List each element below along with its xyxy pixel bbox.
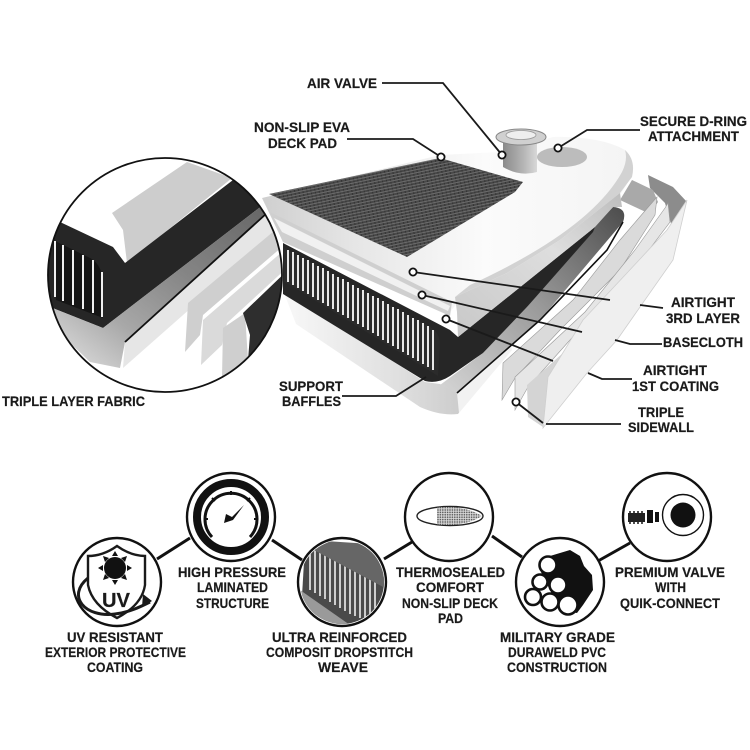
label: non-slip EVA deck pad: NON-SLIP EVA — [254, 119, 350, 135]
leader: air valve — [382, 83, 506, 159]
icon: thermosealed deck pad — [405, 473, 493, 561]
text: military grade: DURAWELD PVC — [508, 644, 606, 660]
inner wall gray — [440, 207, 624, 393]
leader: 1st coating — [442, 315, 632, 379]
wall edge line — [457, 222, 623, 393]
icon: premium valve — [623, 473, 711, 561]
label: support baffles: SUPPORT — [279, 378, 343, 394]
label: basecloth: BASECLOTH — [663, 334, 743, 350]
board top surface — [262, 137, 632, 312]
UV letters: UV — [102, 590, 131, 612]
illustration: exploded board — [262, 129, 687, 428]
swoosh arrow — [78, 578, 150, 614]
nose rim shading — [455, 150, 633, 297]
label: airtight 1st coating: AIRTIGHT — [643, 362, 707, 378]
leader: deck pad — [347, 139, 445, 161]
rail highlight — [274, 218, 450, 311]
label: airtight 1st coating — [632, 362, 719, 394]
text: military grade: MILITARY GRADE — [500, 629, 615, 645]
label: triple layer fabric: TRIPLE LAYER FABRIC — [2, 393, 145, 409]
text: UV resistant: UV RESISTANT — [67, 629, 163, 645]
text: UV resistant: EXTERIOR PROTECTIVE — [45, 644, 186, 660]
leader: support baffles — [342, 377, 426, 396]
leader: D-ring — [554, 130, 640, 152]
connectors between icons — [157, 536, 630, 561]
lens: triple layer fabric close-up — [47, 157, 283, 393]
plate: bottom skin — [283, 290, 510, 414]
text: premium valve — [615, 564, 725, 611]
label: triple sidewall — [628, 404, 694, 435]
rail shading — [270, 212, 452, 316]
text: thermosealed comfort: NON-SLIP DECK — [402, 595, 498, 611]
leader: 3rd layer — [409, 268, 663, 308]
icon: dropstitch weave — [295, 535, 390, 630]
text: thermosealed comfort: THERMOSEALED — [396, 564, 505, 580]
text: premium valve: QUIK-CONNECT — [620, 595, 720, 611]
label: non-slip EVA deck pad — [254, 119, 350, 151]
text: UV resistant: COATING — [87, 659, 143, 675]
lens gray tab — [112, 162, 232, 263]
sheet: outer sidewall top — [648, 175, 687, 227]
text: thermosealed comfort: PAD — [438, 610, 463, 626]
D-ring attachment — [537, 147, 587, 167]
lens sheet layers — [185, 232, 278, 352]
lens dark blob — [243, 276, 282, 356]
sheet: sidewall layer C — [527, 230, 670, 427]
text: military grade — [500, 629, 615, 675]
text: high pressure: STRUCTURE — [196, 595, 269, 611]
air valve — [496, 129, 546, 174]
icon: UV resistant — [73, 538, 161, 626]
label: airtight 1st coating: 1ST COATING — [632, 378, 719, 394]
sheet: sidewall layer A — [502, 197, 657, 400]
label: airtight 3rd layer — [666, 294, 740, 326]
gray tab — [455, 193, 622, 337]
shield — [88, 546, 145, 618]
icon: pressure gauge — [187, 473, 275, 561]
lens gray band — [50, 205, 267, 368]
label: triple sidewall: SIDEWALL — [628, 419, 694, 435]
lens dark fabric — [44, 180, 263, 328]
sheet: sidewall layer B — [515, 203, 670, 410]
text: UV resistant — [45, 629, 186, 675]
text: high pressure — [178, 564, 286, 611]
text: premium valve: PREMIUM VALVE — [615, 564, 725, 580]
text: ultra reinforced — [266, 629, 413, 675]
text: ultra reinforced: COMPOSIT DROPSTITCH — [266, 644, 413, 660]
label: secure D-ring attachment: SECURE D-RING — [640, 113, 747, 129]
leader: sidewall — [512, 398, 621, 424]
sun — [98, 551, 132, 585]
leader: basecloth — [418, 291, 662, 344]
text: ultra reinforced: ULTRA REINFORCED — [272, 629, 407, 645]
text: military grade: CONSTRUCTION — [507, 659, 607, 675]
lens baffle window — [53, 240, 103, 318]
text: high pressure: HIGH PRESSURE — [178, 564, 286, 580]
plate: white strip — [457, 342, 512, 413]
label: airtight 3rd layer: 3RD LAYER — [666, 310, 740, 326]
sheet: outer mottled sidewall — [543, 200, 687, 428]
label: triple sidewall: TRIPLE — [638, 404, 684, 420]
label: airtight 3rd layer: AIRTIGHT — [671, 294, 735, 310]
text: thermosealed comfort: COMFORT — [416, 579, 484, 595]
label: secure D-ring attachment: ATTACHMENT — [648, 128, 739, 144]
lens white strip — [123, 216, 273, 368]
support baffles — [284, 248, 440, 376]
label: secure D-ring attachment — [640, 113, 747, 144]
label: air valve: AIR VALVE — [307, 75, 377, 91]
sheet: inner sidewall top — [620, 180, 658, 214]
deck pad — [269, 158, 523, 257]
text: high pressure: LAMINATED — [197, 579, 268, 595]
icon: duraweld tubes — [516, 538, 604, 626]
text: ultra reinforced: WEAVE — [318, 659, 368, 675]
label: support baffles: BAFFLES — [282, 393, 341, 409]
label: support baffles — [279, 378, 343, 409]
dark fabric core — [283, 227, 595, 382]
label: non-slip EVA deck pad: DECK PAD — [268, 135, 337, 151]
text: thermosealed comfort — [396, 564, 505, 626]
text: premium valve: WITH — [655, 579, 686, 595]
